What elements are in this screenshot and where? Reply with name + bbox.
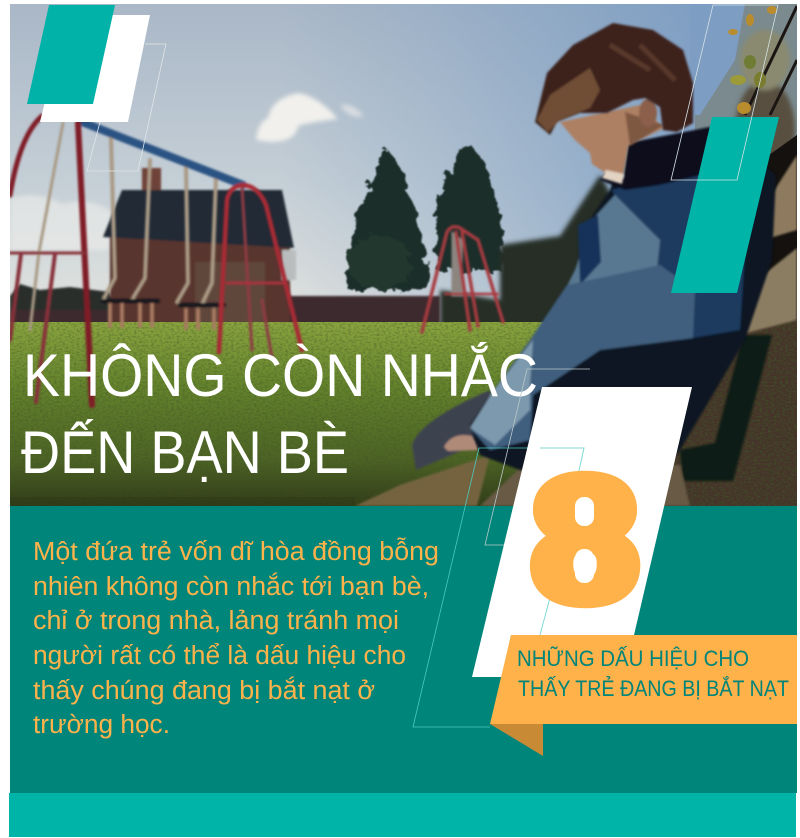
panel: background photo of a lonely boy on a bench bbox=[10, 4, 797, 506]
jacket pocket shadow bbox=[578, 215, 601, 285]
photo: sky bbox=[10, 4, 695, 322]
photo: grass bbox=[10, 322, 570, 506]
photo: swing set bbox=[10, 116, 302, 405]
top-right decorative parallelograms bbox=[671, 5, 779, 293]
top-left decorative parallelograms bbox=[27, 5, 166, 171]
photo: autumn branches bbox=[695, 4, 797, 154]
jacket base bbox=[470, 127, 776, 475]
ribbon text: NHỮNG DẤU HIỆU CHO bbox=[517, 646, 749, 671]
body paragraph: chỉ ở trong nhà, lảng tránh mọi bbox=[33, 607, 399, 635]
body paragraph bbox=[33, 537, 439, 739]
photo: hedge and soil at right bbox=[664, 320, 797, 506]
body paragraph: Một đứa trẻ vốn dĩ hòa đồng bỗng bbox=[33, 537, 439, 566]
decorative outline frames behind the number bbox=[413, 369, 590, 727]
photo: clouds bbox=[10, 93, 364, 250]
photo: boy's trousers and hand bbox=[412, 390, 500, 470]
jacket lit sleeve bbox=[472, 265, 695, 450]
photo: distant swing bbox=[422, 227, 503, 332]
photo: bench slats bbox=[355, 155, 797, 506]
collar bbox=[600, 127, 722, 190]
photo: boy's face bbox=[560, 99, 664, 184]
jacket mid navy upper body bbox=[612, 165, 750, 340]
title bbox=[21, 342, 538, 486]
title: KHÔNG CÒN NHẮC bbox=[23, 342, 538, 409]
body paragraph: người rất có thể là dấu hiệu cho bbox=[33, 642, 406, 670]
jacket lit shoulder bbox=[566, 194, 662, 286]
ribbon banner bbox=[490, 635, 797, 756]
ribbon text bbox=[517, 646, 789, 701]
photo: garden wall bbox=[10, 282, 441, 322]
body paragraph: nhiên không còn nhắc tới bạn bè, bbox=[33, 572, 429, 601]
big number 8: 8 bbox=[532, 442, 638, 636]
bottom teal strip bbox=[9, 793, 796, 837]
photo: bench backing shadow bbox=[725, 135, 797, 345]
teal frame segment over white panel bbox=[540, 448, 584, 635]
title: ĐẾN BẠN BÈ bbox=[21, 419, 349, 486]
photo: background trees and hedge bbox=[348, 144, 620, 330]
photo: brick house bbox=[103, 168, 296, 327]
photo: darker foreground grass edge bbox=[10, 497, 355, 506]
photo: boy's jacket bbox=[470, 127, 776, 475]
photo: boy's hair bbox=[535, 23, 693, 135]
body paragraph: thấy chúng đang bị bắt nạt ở bbox=[33, 676, 375, 705]
body paragraph: trường học. bbox=[33, 711, 170, 739]
panel: lower teal content block bbox=[10, 506, 797, 793]
white parallelogram behind number bbox=[472, 387, 692, 677]
